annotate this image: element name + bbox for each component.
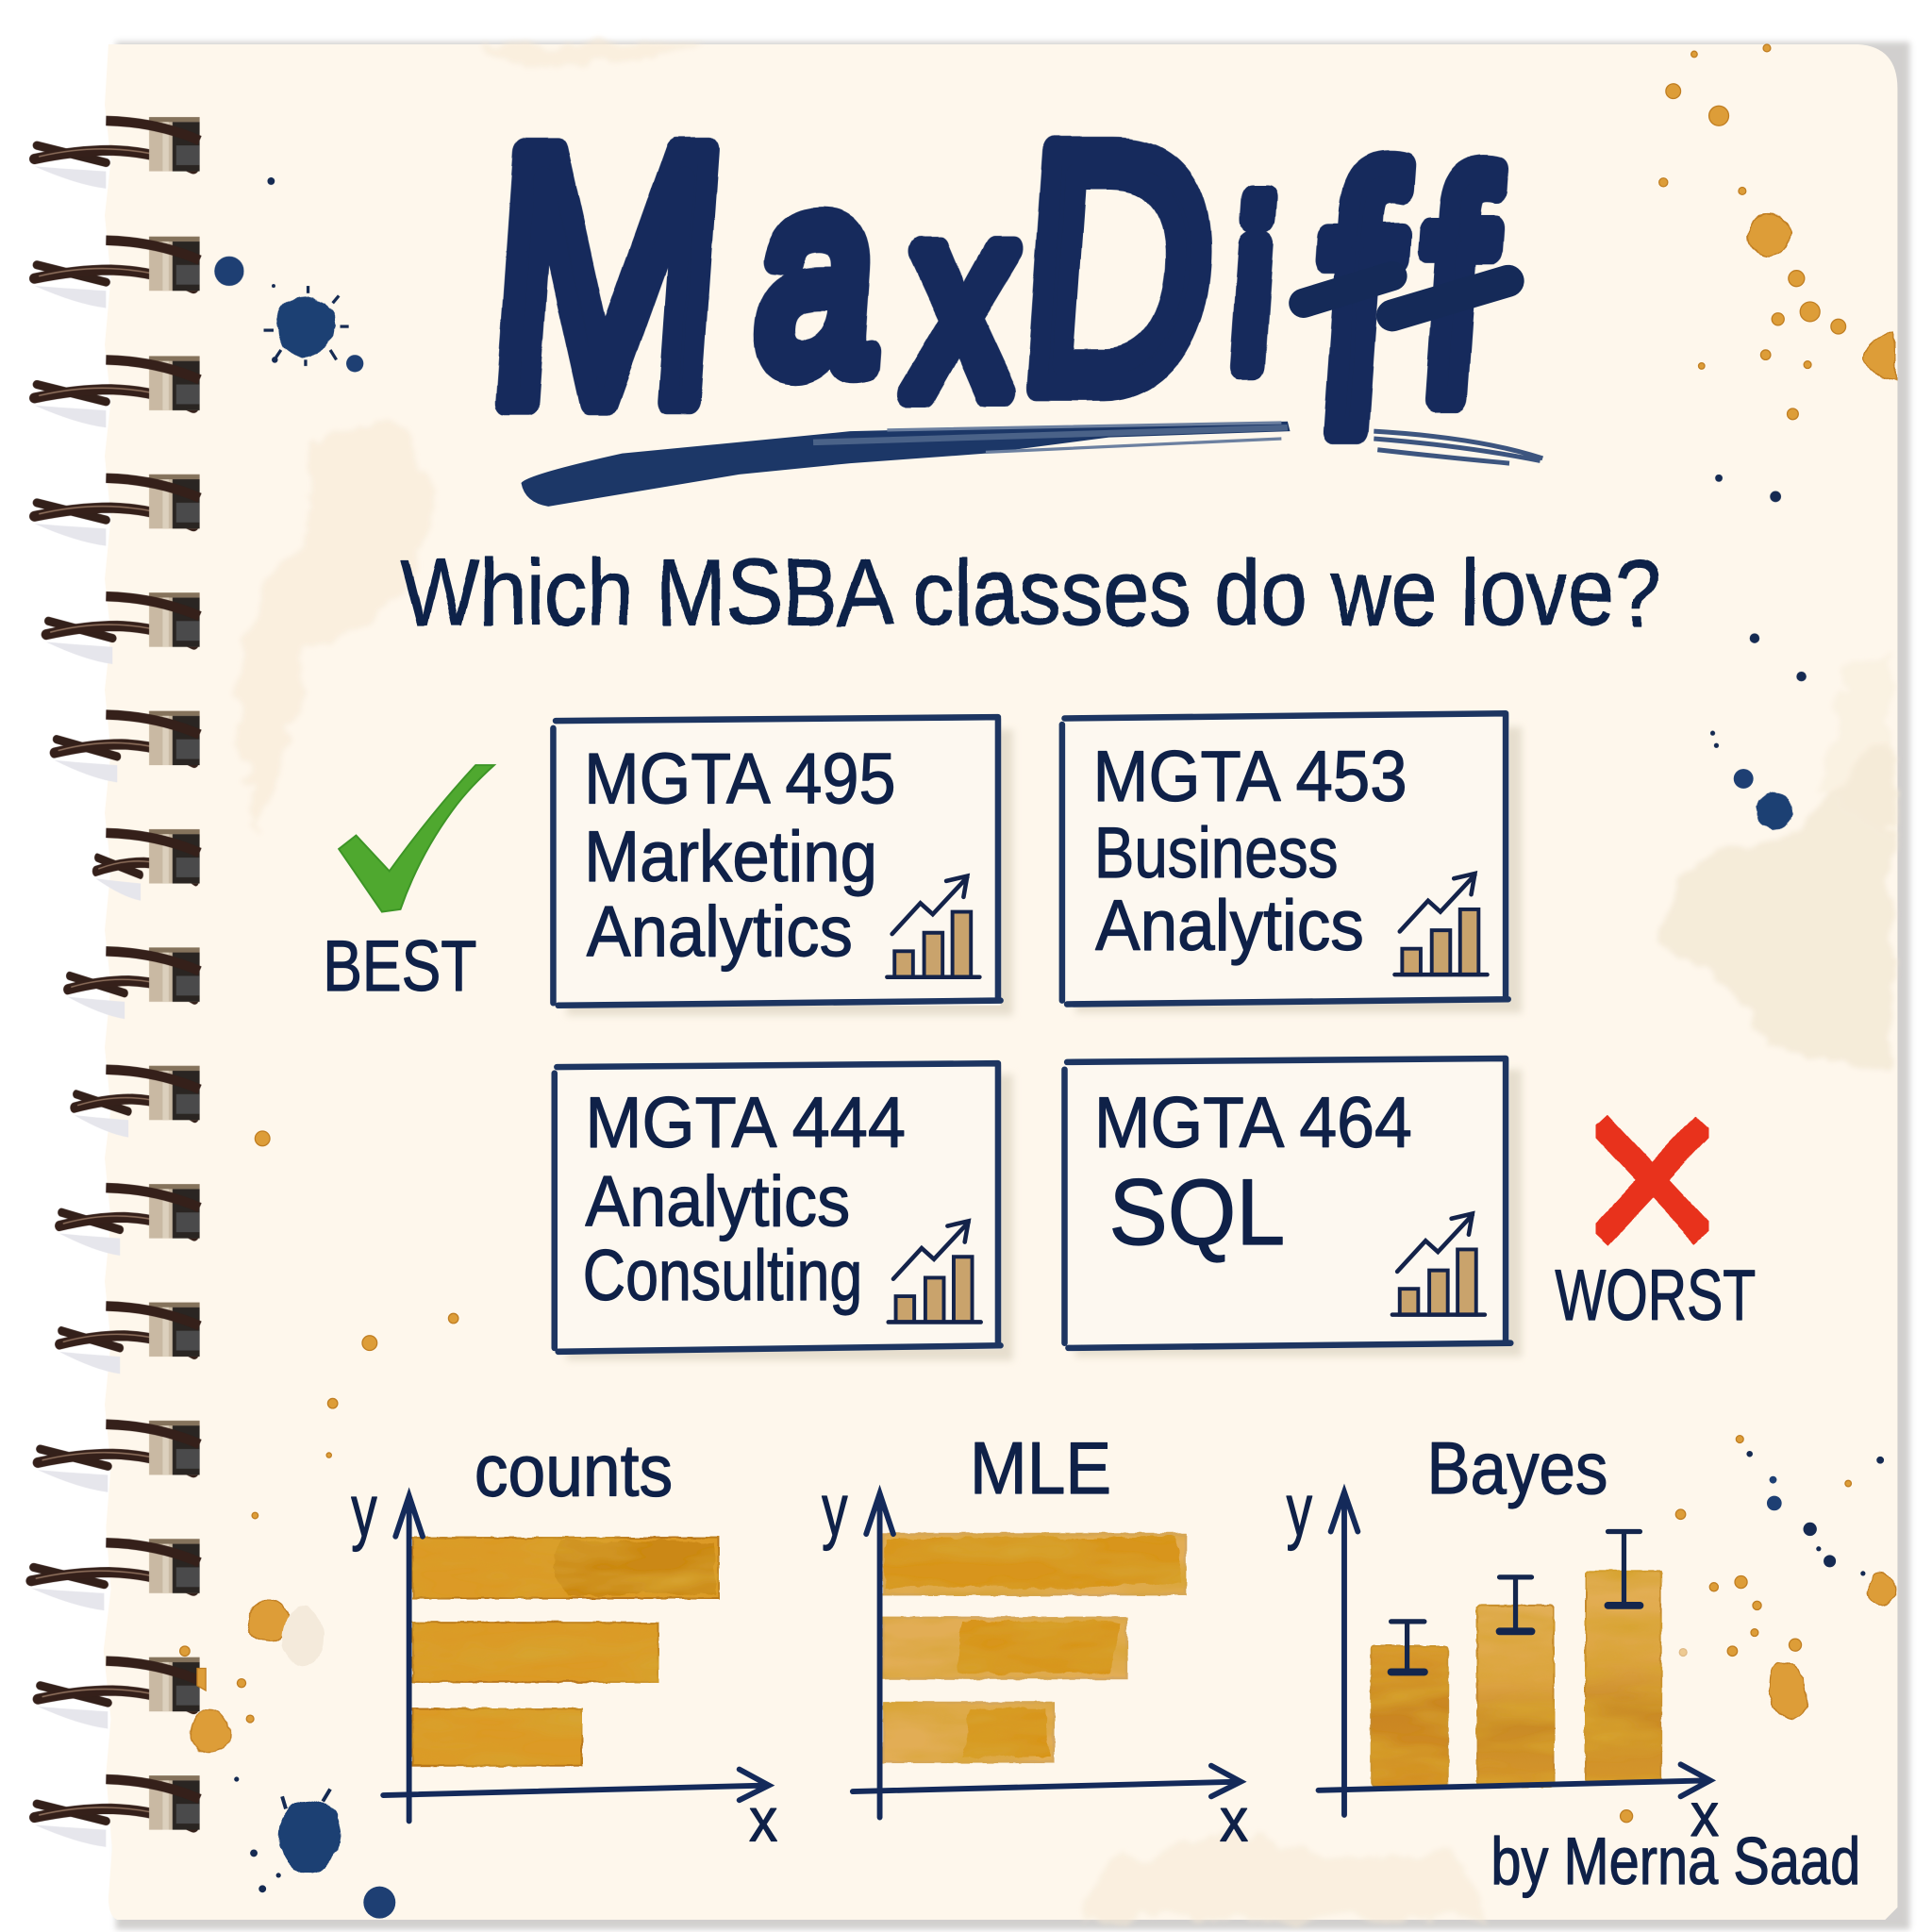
panel: MGTA 495: MGTA 495	[584, 740, 896, 820]
axes	[383, 1496, 769, 1821]
chart: MLE	[822, 1426, 1248, 1854]
panel: MGTA 444: Consulting	[583, 1236, 862, 1316]
navy ink splatters	[214, 177, 1884, 1919]
chart: Bayes: Bayes	[1426, 1426, 1607, 1509]
panel: MGTA 464: SQL	[1109, 1160, 1285, 1265]
chart: MLE: MLE	[970, 1426, 1111, 1509]
pale stain left bottom	[282, 1607, 325, 1666]
panel: MGTA 464	[1063, 1058, 1522, 1357]
chart: counts: x	[749, 1785, 777, 1854]
title brush underline	[521, 422, 1542, 507]
chart: counts	[351, 1429, 777, 1854]
panel: MGTA 453	[1062, 713, 1522, 1013]
bars	[1372, 1571, 1661, 1787]
title	[475, 72, 1506, 509]
panel: MGTA 495: Marketing	[584, 817, 877, 897]
title brush accents	[1304, 276, 1508, 315]
chart: MLE: y	[822, 1468, 848, 1551]
chart: counts: counts	[475, 1429, 673, 1512]
panel: MGTA 444: Analytics	[585, 1162, 850, 1242]
panel: MGTA 453: MGTA 453	[1093, 737, 1407, 817]
panel: MGTA 453: Analytics	[1095, 886, 1364, 966]
title: a	[749, 122, 888, 426]
title: D	[1010, 76, 1226, 461]
panel: MGTA 464: MGTA 464	[1094, 1083, 1412, 1163]
chart: Bayes	[1287, 1426, 1719, 1849]
author credit: by Merna Saad	[1491, 1824, 1860, 1898]
icon: rising bar chart	[889, 1221, 981, 1322]
icon: rising bar chart	[1392, 1214, 1485, 1315]
chart: counts: y	[351, 1470, 377, 1553]
panel: MGTA 444: MGTA 444	[585, 1083, 906, 1163]
title: f	[1304, 96, 1411, 509]
label: worst: WORST	[1555, 1256, 1756, 1336]
icon: rising bar chart	[1395, 874, 1487, 974]
panel: MGTA 495	[553, 717, 1013, 1015]
chart: MLE: x	[1220, 1785, 1248, 1854]
title: i	[1224, 158, 1282, 416]
bars	[883, 1534, 1185, 1762]
title: f	[1409, 110, 1503, 468]
bars	[413, 1538, 718, 1766]
panel: MGTA 444	[553, 1063, 1013, 1360]
axes	[853, 1493, 1241, 1818]
panel: MGTA 453: Business	[1094, 813, 1338, 893]
title: M	[477, 72, 737, 479]
spiral binding	[31, 117, 200, 1847]
axes	[1319, 1492, 1710, 1815]
title: x	[901, 149, 1025, 451]
icon: rising bar chart	[887, 876, 979, 977]
worst cross mark	[1599, 1124, 1706, 1237]
panel: MGTA 495: Analytics	[587, 892, 853, 973]
chart: Bayes: y	[1287, 1468, 1313, 1551]
label: best: BEST	[323, 926, 476, 1007]
chart: Bayes: x	[1690, 1780, 1719, 1849]
subtitle: Which MSBA classes do we love?	[400, 541, 1661, 645]
error bars	[1391, 1532, 1640, 1672]
best check mark	[339, 765, 494, 912]
